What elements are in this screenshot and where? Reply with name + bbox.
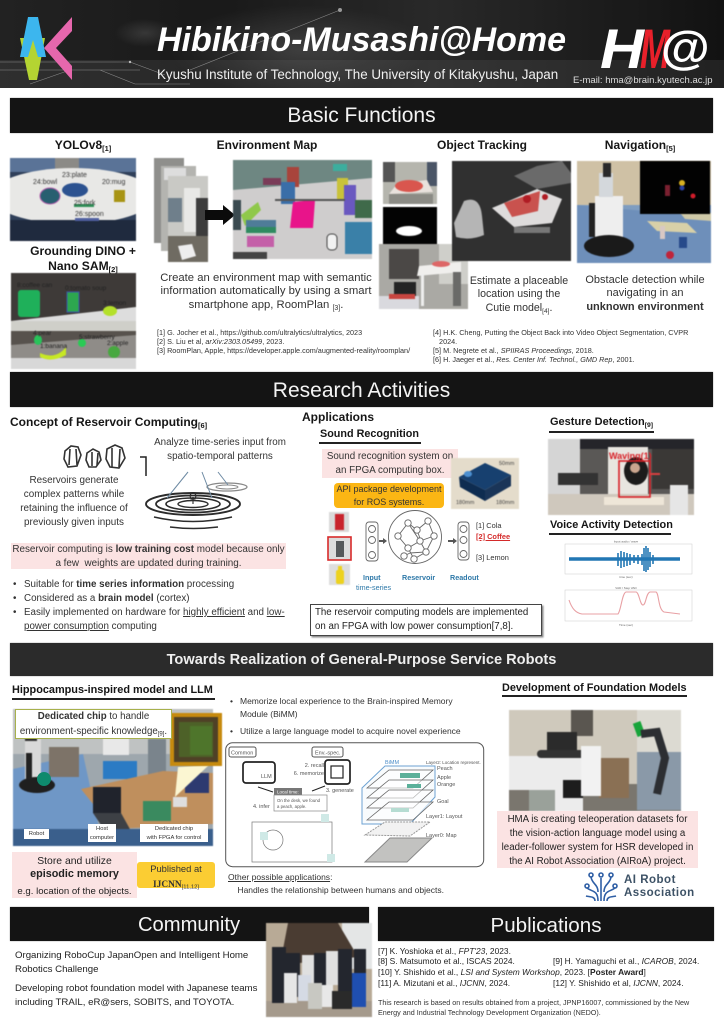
callout: dedicated chip: Dedicated chip to handle bbox=[38, 711, 149, 722]
image: FPGA computing box: 50mm bbox=[499, 461, 515, 467]
callout: API package: API package development bbox=[336, 484, 442, 494]
icon: HMA logo bbox=[600, 22, 709, 72]
icon: AK team logo bbox=[20, 17, 72, 80]
text: navigation description: navigating in an bbox=[606, 287, 684, 299]
heading: YOLOv8: YOLOv8[1] bbox=[55, 138, 111, 153]
text: NEDO acknowledgement: Energy and Industrial Technology Development Organization (NEDO). bbox=[378, 1008, 601, 1017]
text: other possible applications: Other possible applications: bbox=[228, 872, 332, 882]
list: reservoir computing features: • bbox=[13, 579, 16, 590]
heading: Grounding DINO + Nano SAM: Nano SAM[2] bbox=[48, 259, 118, 274]
image: table segmentation bbox=[382, 161, 438, 205]
diagram: BiMM system: Peach bbox=[437, 766, 453, 772]
diagram: BiMM system: Layer2: Location represent. bbox=[426, 760, 481, 765]
references 7 to 12 bbox=[378, 946, 714, 988]
image: YOLOv8 detection on table: 26:spoon bbox=[75, 211, 104, 218]
references 4 to 6 bbox=[433, 328, 688, 364]
label: Dedicated chip with FPGA: Dedicated chip bbox=[155, 826, 193, 832]
diagram: BiMM system: Apple bbox=[437, 775, 451, 781]
image: cola can bbox=[328, 512, 350, 532]
section bar: Towards Realization: Towards Realization of General-Purpose Service Robots bbox=[167, 652, 556, 668]
image: lemon bottle bbox=[328, 564, 350, 586]
diagram: BiMM system: On the desk, we found bbox=[277, 798, 321, 803]
callout: teleoperation datasets bbox=[497, 811, 698, 868]
text: analyze time-series bbox=[154, 437, 286, 462]
heading: Navigation: Navigation[5] bbox=[605, 138, 675, 153]
diagram: BiMM system bbox=[225, 742, 485, 868]
icon: water ripples bbox=[145, 472, 248, 530]
image: Grounding DINO shelf detection: 1:banana bbox=[40, 343, 67, 350]
callout: teleoperation datasets: the vision-action language model using a bbox=[510, 828, 685, 839]
callout: sound recognition system bbox=[322, 449, 458, 478]
title: Hibikino-Musashi@Home bbox=[157, 21, 566, 59]
chart: audio waveform: time (sec) bbox=[619, 575, 633, 579]
callout: API package bbox=[334, 483, 444, 508]
references 4 to 6: 2024. bbox=[439, 337, 457, 346]
text: navigation description bbox=[585, 274, 705, 313]
list: memory bullets: Memorize local experience to the Brain-inspired Memory bbox=[240, 696, 453, 706]
callout: teleoperation datasets: the AI Robot Association (AIRoA) project. bbox=[509, 856, 686, 867]
section bar: Publications: Publications bbox=[490, 914, 602, 937]
heading: Grounding DINO + Nano SAM: Grounding DINO + bbox=[30, 244, 136, 258]
label: Robot: Robot bbox=[29, 831, 44, 837]
image: Grounding DINO shelf detection: 3:lemon bbox=[103, 300, 127, 307]
chart: voice activity probability: VAD / Step VAD bbox=[615, 586, 638, 590]
text: other possible applications: Handles the relationship between humans and objects. bbox=[237, 885, 444, 895]
text: other possible applications bbox=[228, 871, 444, 897]
text: reservoirs generate patterns: previously given inputs bbox=[24, 517, 124, 528]
callout: dedicated chip bbox=[15, 709, 172, 739]
callout: FPGA low power: The reservoir computing models are implemented bbox=[315, 607, 528, 618]
heading: Voice Activity Detection: Voice Activity Detection bbox=[550, 519, 673, 531]
image: Grounding DINO shelf detection: 4:pear bbox=[33, 330, 52, 337]
callout: FPGA low power: on an FPGA with low power consumption[7,8]. bbox=[315, 621, 513, 632]
text: navigation description: unknown environment bbox=[586, 301, 704, 313]
text: navigation description: Obstacle detection while bbox=[585, 274, 705, 286]
heading: Applications: Applications bbox=[302, 410, 374, 424]
logo: AI Robot Association bbox=[584, 870, 694, 902]
text: object tracking description bbox=[470, 275, 568, 314]
text: environment map description: Create an environment map with semantic bbox=[160, 272, 372, 284]
references 1 to 3: [3] RoomPlan, Apple, https://developer.apple.com/augmented-reality/roomplan/ bbox=[157, 346, 410, 355]
text: analyze time-series: Analyze time-series input from bbox=[154, 437, 286, 448]
list: reservoir computing features: power consumption computing bbox=[24, 621, 157, 632]
header banner bbox=[0, 0, 724, 88]
email: E-mail: hma@brain.kyutech.ac.jp bbox=[573, 75, 713, 86]
callout: low training cost: a few weights are updated during training. bbox=[55, 558, 242, 568]
text: NEDO acknowledgement bbox=[378, 998, 689, 1018]
icon: tree network bbox=[584, 870, 618, 902]
image: Grounding DINO shelf detection bbox=[10, 272, 137, 370]
inset: dark obstacle view bbox=[639, 160, 711, 215]
diagram: BiMM system: 4. infer bbox=[253, 804, 270, 810]
callout: episodic memory: episodic memory bbox=[30, 868, 119, 880]
image: FPGA computing box bbox=[450, 457, 520, 510]
diagram: BiMM system: 6. memorize bbox=[294, 771, 324, 777]
diagram: reservoir network bbox=[366, 510, 470, 564]
image: YOLOv8 detection on table: 24:bowl bbox=[33, 179, 58, 186]
image: YOLOv8 detection on table: 25:fork bbox=[74, 200, 96, 207]
section bar: Community: Community bbox=[138, 914, 240, 936]
labels: network stages: time-series bbox=[356, 583, 391, 592]
chart: audio waveform bbox=[564, 540, 692, 579]
image: gesture detection photo: Waving(1) bbox=[609, 451, 652, 461]
callout: published at IJCNN: Published at bbox=[150, 863, 202, 874]
image: 3D environment map bbox=[232, 159, 373, 260]
callout: episodic memory bbox=[12, 852, 137, 898]
callout: teleoperation datasets: HMA is creating teleoperation datasets for bbox=[508, 814, 687, 825]
image: Grounding DINO shelf detection: 0:tomato soup bbox=[65, 285, 107, 292]
label: Host computer bbox=[88, 824, 116, 842]
heading: Object Tracking: Object Tracking bbox=[437, 138, 527, 152]
text: logo wordmark: AI Robot bbox=[624, 874, 676, 886]
callout: FPGA low power bbox=[310, 604, 542, 636]
references 7 to 12: [7] K. Yoshioka et al., FPT'23, 2023. bbox=[378, 946, 511, 956]
text: environment map description bbox=[160, 272, 372, 312]
diagram: BiMM system: Goal bbox=[437, 799, 449, 805]
text: community activities: Robotics Challenge Developing robot foundation model with Japanese teams bbox=[15, 964, 257, 994]
heading: Gesture Detection: Gesture Detection[9] bbox=[550, 416, 653, 429]
section bar: Basic Functions bbox=[10, 98, 713, 133]
marker: robot indicator bbox=[37, 772, 51, 786]
section bar: Community bbox=[10, 907, 369, 941]
labels: network stages: Reservoir bbox=[402, 573, 435, 582]
section bar: Basic Functions: Basic Functions bbox=[287, 104, 436, 127]
references 7 to 12: [12] Y. Shishido et al, IJCNN, 2024. bbox=[553, 978, 684, 988]
image: FPGA computing box: 180mm bbox=[456, 500, 475, 506]
label: Host computer: Host bbox=[96, 826, 108, 832]
callout: sound recognition system: an FPGA computing box. bbox=[336, 465, 444, 476]
callout: published at IJCNN: IJCNN[11,12] bbox=[153, 880, 199, 890]
heading: Sound Recognition: Sound Recognition bbox=[320, 428, 419, 440]
image: gesture detection photo bbox=[548, 438, 695, 516]
image: robot navigating room bbox=[576, 160, 712, 264]
references 1 to 3: [2] S. Liu et al, arXiv:2303.05499, 2023. bbox=[157, 337, 284, 346]
diagram: BiMM system: LLM bbox=[261, 774, 272, 780]
label: Dedicated chip with FPGA bbox=[140, 824, 208, 842]
image: robot lab setup bbox=[13, 709, 213, 846]
list: reservoir computing features: • bbox=[13, 593, 16, 604]
text: logo wordmark: Association bbox=[624, 887, 695, 899]
text: community activities: Organizing RoboCup JapanOpen and Intelligent Home bbox=[15, 950, 248, 961]
image: 3D point cloud tracking bbox=[451, 160, 572, 262]
image: Grounding DINO shelf detection: 2:apple bbox=[107, 340, 129, 347]
image: binary mask bbox=[382, 206, 438, 245]
diagram: BiMM system: Layer1: Layout bbox=[426, 814, 463, 820]
image: Grounding DINO shelf detection: 8:coffee can bbox=[17, 282, 53, 289]
section bar: Publications bbox=[378, 907, 714, 941]
image: teleoperation robots bbox=[509, 710, 681, 811]
chart: voice activity probability bbox=[564, 586, 692, 627]
label: Robot bbox=[24, 829, 49, 839]
label: Dedicated chip with FPGA: with FPGA for control bbox=[147, 834, 201, 840]
references 1 to 3 bbox=[157, 328, 410, 355]
icon: dedicated chip bbox=[170, 713, 222, 766]
list: memory bullets: • bbox=[230, 726, 233, 736]
image: robot at table bbox=[378, 243, 468, 310]
heading: Grounding DINO + Nano SAM bbox=[30, 244, 136, 274]
list: reservoir computing features: • bbox=[13, 607, 16, 618]
references 4 to 6: [5] M. Negrete et al., SPIIRAS Proceedings, 2018. bbox=[433, 346, 594, 355]
diagram: BiMM system: Orange bbox=[437, 782, 455, 788]
diagram: BiMM system: BiMM bbox=[385, 760, 399, 766]
list: reservoir computing features: Considered as a brain model (cortex) bbox=[24, 593, 190, 604]
subtitle: Kyushu Institute of Technology, The University of Kitakyushu, Japan bbox=[157, 67, 558, 82]
diagram: BiMM system: 2. recall bbox=[305, 763, 324, 769]
callout: low training cost: Reservoir computing is low training cost model because only bbox=[12, 544, 285, 555]
section bar: Research Activities: Research Activities bbox=[273, 379, 450, 402]
references 4 to 6: [6] H. Jaeger et al., Res. Center Inf. Technol., GMD Rep, 2001. bbox=[433, 355, 635, 364]
text: environment map description: information automatically by using a smart bbox=[161, 285, 371, 297]
list: memory bullets bbox=[228, 695, 478, 739]
list: memory bullets: • bbox=[230, 696, 233, 706]
image: phone capture stack bbox=[153, 157, 209, 263]
callout: published at IJCNN bbox=[137, 862, 215, 888]
references 7 to 12: [10] Y. Shishido et al., LSI and System Workshop, 2023. [Poster Award] bbox=[378, 966, 646, 976]
callout: sound recognition system: Sound recognition system on bbox=[327, 451, 453, 462]
text: object tracking description: location using the bbox=[478, 288, 560, 300]
references 7 to 12: [8] S. Matsumoto et al., ISCAS 2024. bbox=[378, 956, 515, 966]
labels: network stages bbox=[356, 573, 479, 592]
callout: teleoperation datasets: leader-follower system for HSR developed in bbox=[502, 842, 693, 853]
diagram: BiMM system: Local time: bbox=[277, 790, 299, 794]
list: memory bullets: Utilize a large language model to acquire novel experience bbox=[240, 726, 461, 736]
section bar: Towards Realization bbox=[10, 643, 713, 676]
references 7 to 12: [9] H. Yamaguchi et al., ICAROB, 2024. bbox=[553, 956, 699, 966]
text: reservoirs generate patterns: complex patterns while bbox=[24, 489, 124, 500]
section bar: Research Activities bbox=[10, 372, 713, 407]
heading: Hippocampus-inspired model and LLM: Hippocampus-inspired model and LLM bbox=[12, 684, 213, 696]
diagram: BiMM system: a peach, apple. bbox=[277, 804, 306, 809]
labels: network stages: Input bbox=[363, 573, 381, 582]
text: reservoirs generate patterns bbox=[20, 475, 128, 528]
list: reservoir computing features: Easily implemented on hardware for highly efficient and low- bbox=[24, 607, 285, 618]
diagram: BiMM system: Env.-spec. bbox=[315, 750, 341, 756]
text: community activities: including TRAIL, eR@sers, SOBITS, and TOYOTA. bbox=[15, 997, 234, 1008]
text: logo wordmark bbox=[624, 874, 695, 900]
callout: episodic memory: e.g. location of the objects. bbox=[17, 886, 132, 897]
text: object tracking description: Cutie model[4]. bbox=[486, 302, 552, 314]
labels: readout classes: [3] Lemon bbox=[476, 553, 509, 562]
list: reservoir computing features bbox=[13, 579, 285, 632]
image: YOLOv8 detection on table bbox=[9, 157, 137, 242]
text: analyze time-series: spatio-temporal patterns bbox=[167, 451, 273, 462]
callout: episodic memory: Store and utilize bbox=[37, 856, 112, 867]
heading: Development of Foundation Models: Development of Foundation Models bbox=[502, 682, 687, 694]
callout: low training cost bbox=[11, 543, 286, 569]
text: NEDO acknowledgement: This research is based on results obtained from a project, JPNP16007, commissioned by the New bbox=[378, 998, 689, 1007]
text: community activities bbox=[15, 949, 257, 1010]
image: FPGA computing box: 180mm bbox=[496, 500, 515, 506]
image: coffee can selected bbox=[327, 536, 352, 561]
image: Grounding DINO shelf detection: 5:strawberry bbox=[79, 334, 116, 341]
diagram: BiMM system: Layer0: Map bbox=[426, 833, 457, 839]
heading: Environment Map: Environment Map bbox=[217, 138, 317, 152]
diagram: BiMM system: Common bbox=[231, 750, 253, 756]
arrow: photos to map bbox=[205, 205, 234, 225]
text: reservoirs generate patterns: retaining the influence of bbox=[20, 503, 128, 514]
labels: network stages: Readout bbox=[450, 573, 479, 582]
chart: voice activity probability: Time (sec) bbox=[619, 623, 633, 627]
list: memory bullets: Module (BiMM) bbox=[240, 708, 298, 718]
labels: readout classes: [1] Cola bbox=[476, 521, 501, 530]
label: Host computer: computer bbox=[90, 834, 114, 840]
circuit background pattern bbox=[0, 8, 724, 88]
image: YOLOv8 detection on table: 20:mug bbox=[102, 179, 125, 186]
text: reservoirs generate patterns: Reservoirs generate bbox=[30, 475, 118, 486]
list: reservoir computing features: Suitable for time series information processing bbox=[24, 579, 234, 590]
icon: reservoir stones bbox=[63, 444, 126, 469]
callout: API package: for ROS systems. bbox=[354, 496, 424, 506]
image: YOLOv8 detection on table: 23:plate bbox=[62, 172, 87, 179]
heading: Concept of Reservoir Computing: Concept of Reservoir Computing[6] bbox=[10, 415, 207, 430]
references 4 to 6: [4] H.K. Cheng, Putting the Object Back into Video Object Segmentation, CVPR bbox=[433, 328, 688, 337]
text: object tracking description: Estimate a placeable bbox=[470, 275, 568, 287]
callout: dedicated chip: environment-specific knowledge[9]. bbox=[20, 726, 167, 737]
diagram: BiMM system: 3. generate bbox=[326, 788, 354, 794]
labels: readout classes: [2] Coffee bbox=[476, 532, 510, 541]
image: community group photo bbox=[266, 923, 372, 1017]
labels: readout classes bbox=[476, 521, 510, 562]
references 1 to 3: [1] G. Jocher et al., https://github.com/ultralytics/ultralytics, 2023 bbox=[157, 328, 362, 337]
icon: bracket bbox=[140, 456, 147, 476]
references 7 to 12: [11] A. Mizutani et al., IJCNN, 2024. bbox=[378, 978, 510, 988]
text: environment map description: smartphone app, RoomPlan [3]. bbox=[189, 299, 343, 312]
